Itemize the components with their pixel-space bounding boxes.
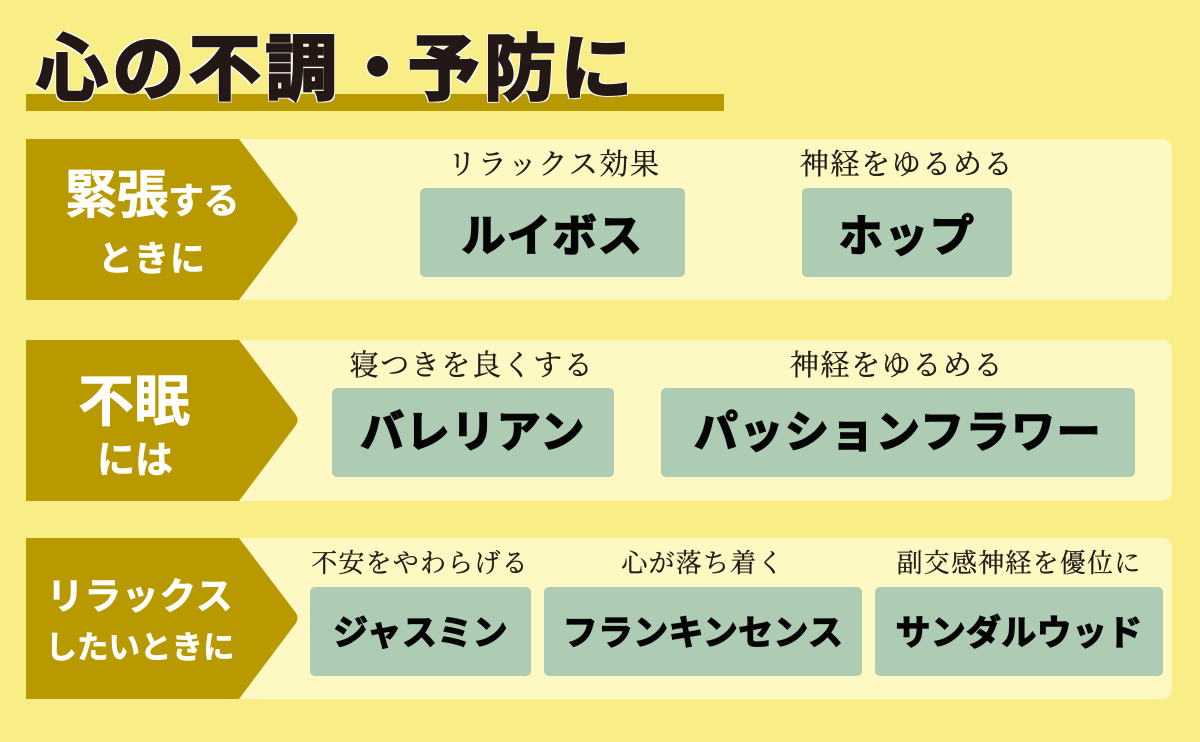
item: frankincense: フランキンセンス bbox=[563, 614, 843, 653]
label: 緊張するときに: 緊張する bbox=[65, 167, 239, 225]
caption: nerves: 神経をゆるめる bbox=[790, 350, 1004, 382]
caption: nerves: 神経をゆるめる bbox=[800, 149, 1014, 181]
item: jasmine: ジャスミン bbox=[333, 614, 508, 653]
row background bbox=[26, 340, 1172, 501]
caption: anxiety: 不安をやわらげる bbox=[311, 549, 529, 578]
label line 2: ときに bbox=[98, 240, 206, 279]
caption: calm: 心が落ち着く bbox=[621, 549, 785, 578]
row background bbox=[26, 538, 1172, 699]
label: リラックス: リラックス bbox=[47, 576, 233, 617]
arrow label shape bbox=[26, 139, 298, 300]
title bbox=[26, 30, 724, 111]
row background bbox=[26, 139, 1172, 300]
arrow label shape bbox=[26, 340, 298, 501]
item: valerian bbox=[332, 388, 614, 477]
item: hops bbox=[802, 188, 1012, 277]
item: jasmine bbox=[310, 587, 531, 676]
label: 不眠: 不眠 bbox=[78, 370, 190, 433]
item: valerian: バレリアン bbox=[360, 408, 586, 457]
item: sandalwood bbox=[875, 587, 1163, 676]
caption: relax: リラックス効果 bbox=[447, 149, 661, 181]
item: passionflower: パッションフラワー bbox=[694, 408, 1102, 457]
panel: tension bbox=[26, 139, 1172, 300]
title underline bbox=[26, 94, 724, 111]
caption: sleep: 寝つきを良くする bbox=[350, 350, 594, 382]
label: には: には bbox=[97, 440, 173, 482]
item: frankincense bbox=[544, 587, 862, 676]
title text: 心の不調・予防に bbox=[36, 30, 637, 110]
item: rooibos: ルイボス bbox=[462, 212, 644, 261]
panel: relax bbox=[26, 538, 1172, 699]
item: passionflower bbox=[661, 388, 1135, 477]
caption: parasympathetic: 副交感神経を優位に bbox=[897, 549, 1141, 578]
label: したいときに: したいときに bbox=[45, 629, 235, 665]
panel: insomnia bbox=[26, 340, 1172, 501]
item: rooibos bbox=[420, 188, 685, 277]
arrow label shape bbox=[26, 538, 298, 699]
item: sandalwood: サンダルウッド bbox=[895, 614, 1143, 653]
item: hops: ホップ bbox=[839, 212, 975, 261]
